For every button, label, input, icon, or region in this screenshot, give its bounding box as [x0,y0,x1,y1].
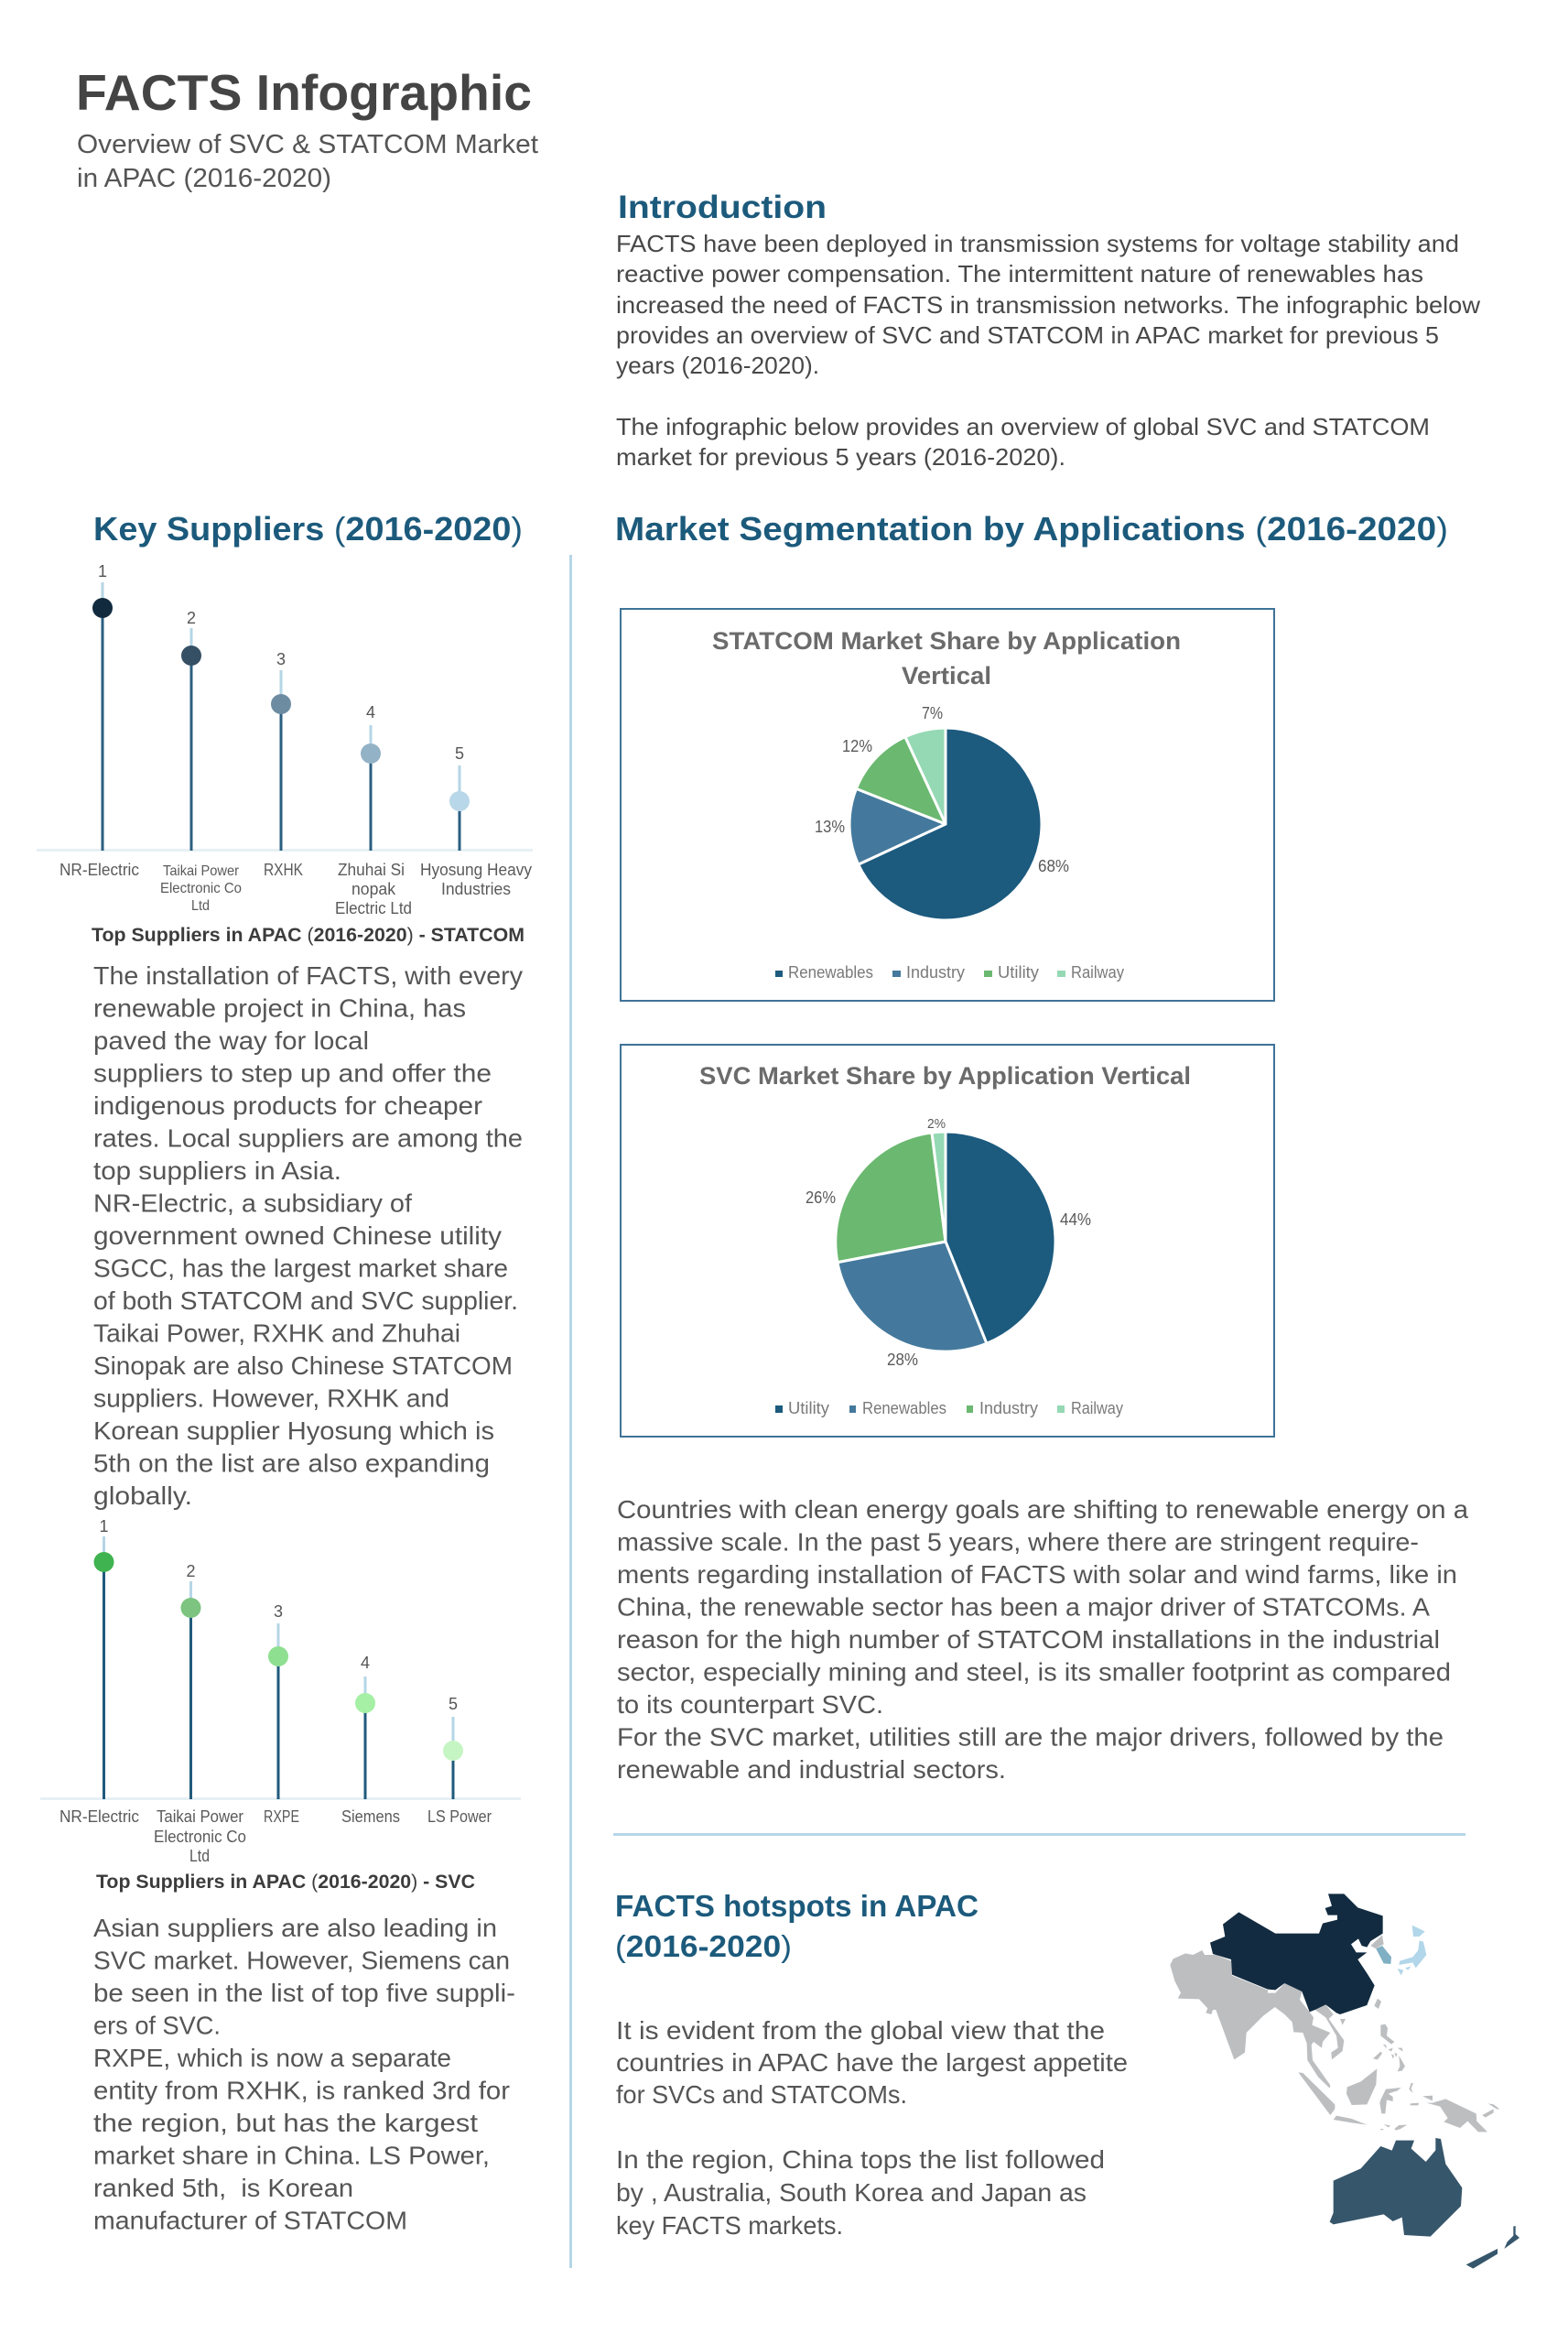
text block: SVC suppliers: SVC market. However, Siemens can [93,1947,510,1974]
map: South Korea [1376,1946,1391,1964]
pie data labels: 26% [806,1188,836,1207]
text block: hotspots: for SVCs and STATCOMs. [616,2080,907,2109]
text block: market segmentation analysis [617,1495,1468,1784]
lollipop 5: Hyosung Heavy Industries: Hyosung Heavy [420,861,532,879]
caption: SVC chart: Top Suppliers in APAC (2016-2020) - SVC [96,1872,475,1893]
text block: STATCOM suppliers: rates. Local suppliers are among the [93,1124,523,1152]
lollipop 1: NR-Electric: 1 [99,1517,109,1536]
text block: introduction: reactive power compensation. The intermittent nature of renewables has [616,260,1423,288]
heading: market segmentation: Market Segmentation by Applications (2016-2020 ) [615,510,1448,548]
text block: introduction: market for previous 5 years (2016-2020). [616,443,1065,471]
pie slices [849,728,1042,920]
text block: STATCOM suppliers: Korean supplier Hyosung which is [93,1416,494,1445]
lollipop 2: Taikai Power: Ltd [189,1847,210,1865]
pie data labels: 28% [887,1351,918,1369]
text block: hotspots [616,2016,1128,2240]
lollipop 5: Hyosung Heavy Industries: Industries [441,880,511,898]
heading: key suppliers: Key Suppliers (2016-2020) [93,510,523,548]
text block: introduction: years (2016-2020). [616,352,819,379]
chart title [712,627,1181,689]
text block: hotspots: by , Australia, South Korea and Japan as [616,2178,1087,2207]
pie data labels: 7% [922,704,943,722]
lollipop 2: Taikai Power: Electronic Co [154,1828,246,1846]
text block: STATCOM suppliers: indigenous products for cheaper [93,1091,482,1120]
lollipop 4: Siemens: Siemens [341,1807,400,1826]
subtitle: in APAC (2016-2020) [77,164,331,193]
text block: market segmentation analysis: renewable and industrial sectors. [617,1755,1006,1784]
lollipop 4: Zhuhai Sinopak: 4 [366,703,375,722]
lollipop 4: Zhuhai Sinopak: Zhuhai Si [338,861,405,879]
chart title: STATCOM Market Share by Application [712,627,1181,655]
text block: SVC suppliers: RXPE, which is now a separate [93,2044,451,2072]
map: Australia and New Zealand [1330,2138,1519,2269]
text block: hotspots: key FACTS markets. [616,2211,843,2240]
lollipop 2: Taikai Power: Ltd [191,898,210,914]
lollipop 2: Taikai Power: 2 [187,609,196,627]
text block: market segmentation analysis: Countries with clean energy goals are shifting to renewable energy on a [617,1495,1468,1524]
heading: FACTS hotspots: FACTS hotspots in APAC [615,1889,979,1923]
pie data labels: 12% [842,737,872,755]
lollipop 5: Hyosung Heavy Industries: 5 [455,744,464,763]
text block: introduction [616,230,1480,471]
lollipop 1: NR-Electric [59,1517,139,1826]
text block: STATCOM suppliers: NR-Electric, a subsidiary of [93,1188,412,1218]
lollipop 1: NR-Electric: NR-Electric [59,1807,139,1826]
legend: Renewables [862,1399,946,1417]
text block: STATCOM suppliers: SGCC, has the largest market share [93,1254,508,1282]
legend: Industry [979,1399,1038,1417]
text block: market segmentation analysis: sector, especially mining and steel, is its smaller footprint as compared [617,1657,1451,1687]
text block: SVC suppliers [93,1914,515,2234]
horizontal divider [613,1833,1465,1836]
text block: introduction: increased the need of FACTS in transmission networks. The infographic below [616,291,1480,319]
panel: SVC pie chart [621,1045,1274,1437]
text block: market segmentation analysis: massive scale. In the past 5 years, where there are stringent require- [617,1527,1419,1557]
text block: market segmentation analysis: For the SVC market, utilities still are the major drivers, followed by the [617,1723,1444,1751]
subtitle: Overview of SVC & STATCOM Market [77,130,538,159]
chart: top suppliers SVC lollipop [40,1517,521,1865]
subtitle [77,130,538,193]
text block: STATCOM suppliers: paved the way for local [93,1026,369,1055]
text block: SVC suppliers: entity from RXHK, is ranked 3rd for [93,2077,510,2104]
pie data labels [806,1116,1091,1369]
text block: introduction: FACTS have been deployed in transmission systems for voltage stability and [616,230,1459,257]
lollipop 3: RXPE: RXPE [264,1807,299,1826]
caption: STATCOM chart: Top Suppliers in APAC (2016-2020) - STATCOM [92,925,524,946]
map: APAC hotspots [1170,1894,1519,2269]
lollipop 4: Zhuhai Sinopak: Electric Ltd [335,899,412,917]
legend: Utility [788,1399,829,1417]
text block: STATCOM suppliers: top suppliers in Asia. [93,1156,341,1185]
legend [775,963,1124,982]
text block: STATCOM suppliers: Taikai Power, RXHK and Zhuhai [93,1318,460,1348]
lollipop 3: RXHK [264,650,303,879]
vertical divider between columns [569,555,572,2268]
lollipop 1: NR-Electric: NR-Electric [59,861,139,879]
heading: FACTS hotspots: (2016-2020 ) [615,1929,792,1963]
map: China [1210,1894,1383,2014]
text block: STATCOM suppliers: suppliers to step up and offer the [93,1058,492,1088]
text block: STATCOM suppliers: of both STATCOM and SVC supplier. [93,1286,518,1315]
lollipop 2: Taikai Power [160,609,242,914]
text block: STATCOM suppliers: globally. [93,1481,192,1510]
text block: SVC suppliers: Asian suppliers are also leading in [93,1914,497,1942]
chart: top suppliers STATCOM lollipop [37,562,533,917]
lollipop 1: NR-Electric [59,562,139,879]
chart title: SVC Market Share by Application Vertical [699,1062,1191,1090]
lollipop 5: LS Power [427,1695,492,1826]
legend: Renewables [788,963,873,982]
legend: Railway [1071,963,1124,982]
lollipop 3: RXPE [264,1602,299,1826]
lollipop 3: RXHK: RXHK [264,861,303,879]
pie data labels: 2% [927,1116,946,1132]
pie data labels: 44% [1060,1210,1091,1229]
text block: STATCOM suppliers: 5th on the list are also expanding [93,1449,490,1478]
text block: STATCOM suppliers: suppliers. However, RXHK and [93,1384,449,1412]
lollipop 5: LS Power: 5 [449,1695,458,1713]
pie data labels: 68% [1038,857,1069,875]
text block: market segmentation analysis: China, the renewable sector has been a major driver of STATCOMs. A [617,1593,1430,1621]
text block: STATCOM suppliers: government owned Chinese utility [93,1221,502,1250]
legend: Industry [906,963,965,982]
heading: introduction: Introduction [618,190,827,225]
title: FACTS Infographic [76,64,532,121]
lollipop 3: RXHK: 3 [276,650,286,668]
legend: Railway [1071,1399,1123,1417]
text block: SVC suppliers: the region, but has the kargest [93,2109,478,2137]
lollipop 5: LS Power: LS Power [427,1807,492,1826]
text block: introduction: The infographic below provides an overview of global SVC and STATCOM [616,413,1430,440]
text block: hotspots: It is evident from the global view that the [616,2016,1105,2045]
text block: hotspots: In the region, China tops the list followed [616,2145,1105,2174]
panel: STATCOM pie chart [621,609,1274,1001]
text block: SVC suppliers: be seen in the list of top five suppli- [93,1979,515,2007]
lollipop 4: Zhuhai Sinopak: nopak [351,880,396,898]
lollipop 2: Taikai Power: Taikai Power [163,863,240,879]
lollipop 2: Taikai Power: Taikai Power [157,1807,243,1826]
text block: SVC suppliers: ers of SVC. [93,2011,221,2040]
text block: hotspots: countries in APAC have the largest appetite [616,2048,1128,2077]
lollipop 4: Siemens: 4 [361,1654,370,1672]
pie data labels: 13% [815,818,845,836]
pie data labels [815,704,1069,875]
lollipop 4: Zhuhai Sinopak [335,703,412,917]
text block: STATCOM suppliers: renewable project in China, has [93,994,466,1022]
text block: SVC suppliers: market share in China. LS Power, [93,2141,490,2170]
map: grey other countries [1170,1935,1499,2132]
text block: market segmentation analysis: reason for the high number of STATCOM installations in the industrial [617,1625,1440,1654]
legend: Utility [998,963,1039,982]
lollipop 2: Taikai Power [154,1562,246,1865]
text block: STATCOM suppliers: The installation of FACTS, with every [93,961,523,990]
chart title: Vertical [902,662,991,689]
lollipop 1: NR-Electric: 1 [98,562,107,581]
text block: SVC suppliers: manufacturer of STATCOM [93,2207,407,2234]
text block: market segmentation analysis: to its counterpart SVC. [617,1690,883,1719]
pie slices [836,1132,1055,1351]
map: Japan [1398,1926,1426,1975]
lollipop 4: Siemens [341,1654,400,1826]
lollipop 5: Hyosung Heavy Industries [420,744,532,898]
text block: introduction: provides an overview of SVC and STATCOM in APAC market for previous 5 [616,321,1439,349]
text block: SVC suppliers: ranked 5th, is Korean [93,2174,353,2202]
legend [775,1399,1123,1417]
lollipop 3: RXPE: 3 [274,1602,283,1621]
lollipop 2: Taikai Power: 2 [186,1562,196,1580]
lollipop 2: Taikai Power: Electronic Co [160,881,242,896]
text block: market segmentation analysis: ments regarding installation of FACTS with solar and wind farms, like in [617,1560,1457,1589]
heading: FACTS hotspots [615,1889,979,1963]
text block: STATCOM suppliers: Sinopak are also Chinese STATCOM [93,1351,513,1380]
text block: STATCOM suppliers [93,961,523,1510]
